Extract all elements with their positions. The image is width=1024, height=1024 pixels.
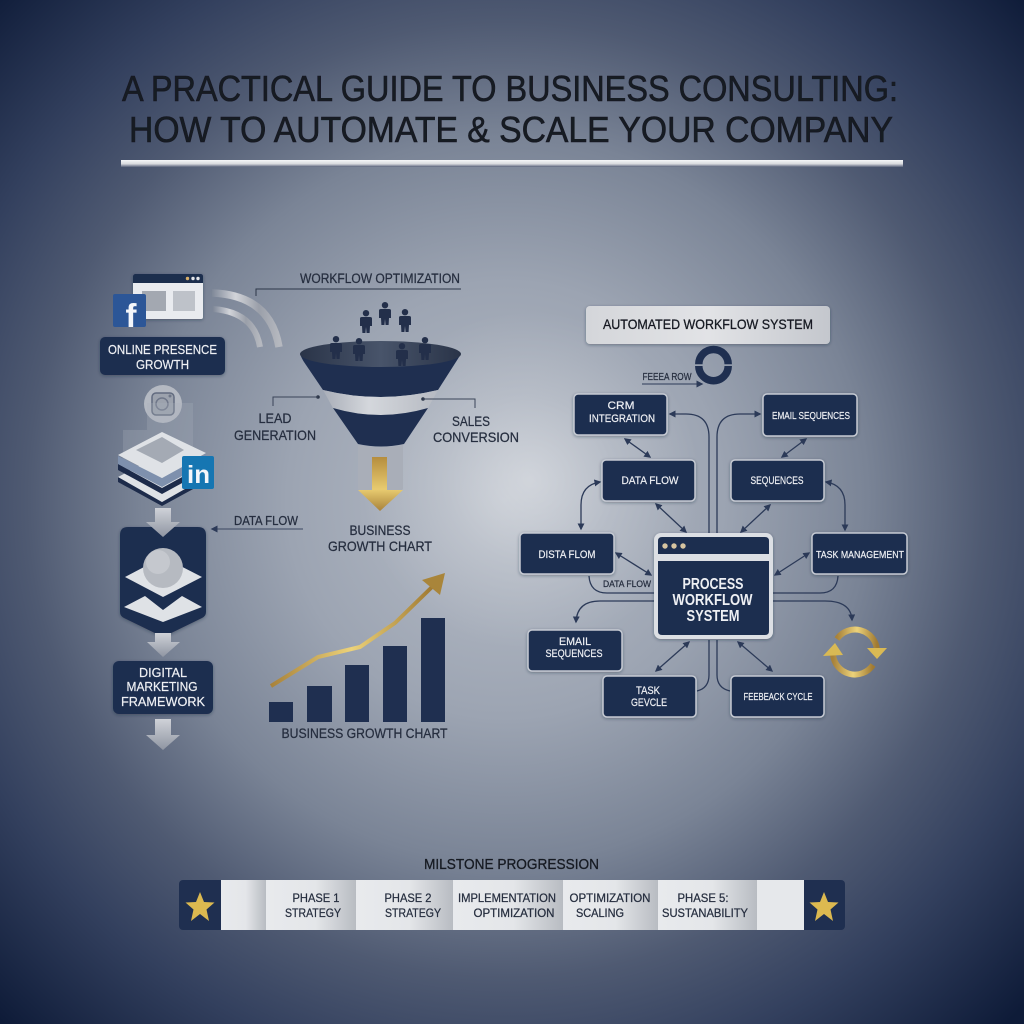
label: digital marketing framework: FRAMEWORK: [121, 694, 205, 709]
node: feedback cycle: [731, 676, 824, 717]
icon: instagram: [144, 385, 182, 423]
node: task gevcle: [603, 676, 696, 717]
label: sales conversion: CONVERSION: [433, 429, 519, 445]
node: task management: [812, 533, 907, 574]
node: dista flom: [520, 533, 614, 574]
icon: globe shield: [120, 527, 206, 637]
phase 3: IMPLEMENTATION: [458, 891, 556, 905]
node: task management: TASK MANAGEMENT: [816, 549, 904, 561]
panel: automated workflow system: [520, 306, 907, 717]
node: process workflow system: [654, 533, 773, 639]
phase 2: STRATEGY: [385, 906, 441, 920]
icon: facebook: f: [126, 297, 138, 334]
label: business growth chart: GROWTH CHART: [328, 538, 432, 554]
label: feedback row: FEEEA ROW: [642, 371, 692, 383]
phase 2: PHASE 2: [384, 891, 432, 905]
icon: browser window: [133, 274, 203, 319]
node: data flow: [602, 460, 695, 501]
icon: stacked layers: [118, 403, 206, 506]
phase 1: [285, 891, 341, 920]
label: online presence growth: GROWTH: [136, 357, 189, 372]
heading: AUTOMATED WORKFLOW SYSTEM: [603, 316, 813, 332]
node: crm integration: INTEGRATION: [589, 413, 655, 425]
label: data flow pointer: [212, 514, 303, 529]
node: crm integration: CRM: [608, 400, 634, 412]
node: feedback cycle: FEEBEACK CYCLE: [744, 691, 812, 703]
heading: MILSTONE PROGRESSION: [424, 857, 599, 873]
label: business growth chart: [328, 522, 432, 554]
phase 3: [458, 891, 556, 920]
label: lead generation: [234, 395, 320, 443]
node: process workflow system: WORKFLOW: [672, 592, 753, 609]
label: workflow optimization: [256, 271, 461, 296]
title: HOW TO AUTOMATE & SCALE YOUR COMPANY: [129, 109, 893, 150]
arrow: [146, 719, 180, 750]
node: task gevcle: GEVCLE: [631, 697, 667, 709]
panel: milestone progression: [179, 857, 845, 930]
phase 5: PHASE 5:: [678, 891, 728, 905]
phase 2: [384, 891, 441, 920]
phase 4: [570, 891, 650, 920]
icon: feedback ring: [699, 350, 728, 381]
icon: people: [330, 302, 431, 366]
icon: gold cycle: [823, 630, 887, 675]
funnel shape: [300, 341, 461, 511]
title rule: [121, 160, 903, 167]
node: task gevcle: TASK: [636, 685, 661, 697]
label: digital marketing framework: [113, 661, 213, 714]
label: business growth chart: BUSINESS: [350, 522, 410, 538]
label: digital marketing framework: MARKETING: [126, 679, 198, 694]
heading: [586, 306, 830, 344]
node: process workflow system: PROCESS: [682, 576, 744, 593]
milestone bar: [221, 880, 804, 930]
label: sales conversion: [421, 397, 519, 445]
panel: online presence column: [100, 274, 303, 750]
arrow: gold down: [358, 457, 403, 511]
node: sequences: [731, 460, 824, 501]
node: process workflow system: SYSTEM: [686, 608, 740, 625]
icon: linkedin: in: [187, 461, 210, 489]
phase 4: SCALING: [576, 906, 624, 920]
node: email sequences top: [763, 394, 857, 436]
bar chart: business growth: [269, 573, 448, 741]
node: email sequences top: EMAIL SEQUENCES: [772, 410, 850, 422]
label: lead generation: GENERATION: [234, 427, 316, 443]
phase 1: PHASE 1: [292, 891, 340, 905]
phase 4: OPTIMIZATION: [570, 891, 650, 905]
icon: linkedin: [182, 456, 214, 489]
title: A PRACTICAL GUIDE TO BUSINESS CONSULTING:: [122, 68, 898, 109]
node: crm integration: [574, 394, 667, 435]
label: data flow pointer: DATA FLOW: [234, 514, 298, 528]
panel: funnel: [234, 271, 519, 554]
chart caption: BUSINESS GROWTH CHART: [282, 726, 448, 741]
icon: facebook: [113, 294, 146, 334]
node: data flow: DATA FLOW: [622, 475, 679, 487]
label: small data flow: DATA FLOW: [603, 579, 651, 590]
phase 3: OPTIMIZATION: [474, 906, 554, 920]
arrow: [147, 633, 180, 657]
label: sales conversion: SALES: [452, 413, 490, 429]
phase 1: STRATEGY: [285, 906, 341, 920]
label: workflow optimization: WORKFLOW OPTIMIZATION: [300, 271, 460, 286]
node: sequences: SEQUENCES: [750, 475, 804, 487]
node: email sequences lower: [528, 630, 622, 671]
icon: signal arcs: [212, 293, 279, 347]
phase 5: [662, 891, 748, 920]
node: email sequences lower: EMAIL: [559, 636, 591, 648]
label: online presence growth: [100, 337, 225, 375]
arrow: gold growth line: [271, 573, 445, 686]
arrow: [146, 508, 180, 537]
label: lead generation: LEAD: [258, 410, 292, 426]
label: online presence growth: ONLINE PRESENCE: [108, 342, 217, 357]
left star cap: [179, 880, 225, 930]
title: [122, 68, 898, 150]
label: digital marketing framework: DIGITAL: [139, 665, 187, 680]
node: dista flom: DISTA FLOM: [538, 549, 596, 561]
right star cap: [800, 880, 845, 930]
phase 5: SUSTANABILITY: [662, 906, 748, 920]
node: email sequences lower: SEQUENCES: [546, 648, 602, 660]
connectors: [576, 414, 852, 691]
